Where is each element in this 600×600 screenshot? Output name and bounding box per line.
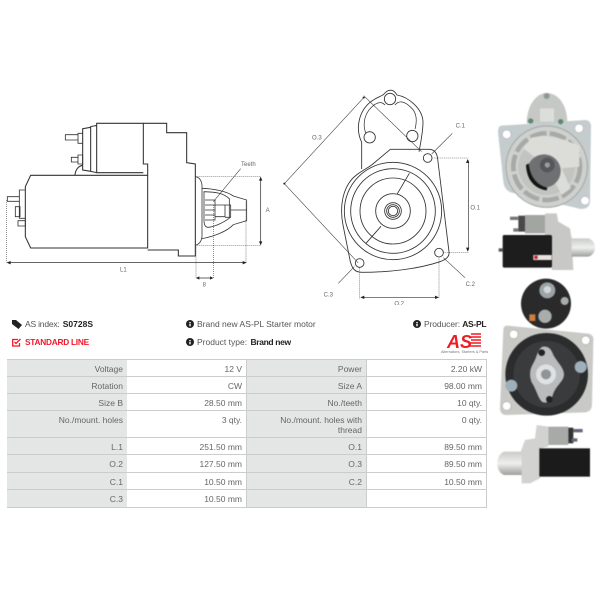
photo: mirrored side view [497, 425, 590, 483]
specification table: 89.50 mm [444, 459, 482, 469]
front view labels: C.3 [324, 292, 334, 298]
specification table: thread [338, 425, 362, 435]
specification table: 3 qty. [222, 415, 242, 425]
side view labels: Teeth [241, 162, 256, 168]
specification table: Rotation [91, 381, 123, 391]
side view labels [120, 162, 270, 288]
front view labels: O.1 [470, 205, 481, 211]
producer: Producer: AS-PL [424, 319, 486, 329]
icon: checked box [12, 338, 21, 347]
front view labels: C.2 [466, 282, 476, 288]
side view technical drawing [6, 122, 270, 288]
dimension lines [7, 169, 261, 279]
product type: Product type: Brand new [197, 337, 291, 347]
dimension lines [284, 96, 468, 298]
drive nose and pinion [195, 177, 247, 245]
standard line badge: STANDARD LINE [25, 337, 89, 347]
specification table: 28.50 mm [204, 398, 242, 408]
icon: info [186, 338, 194, 346]
specification table: O.3 [348, 459, 362, 469]
specification table: 89.50 mm [444, 442, 482, 452]
icon: info [413, 320, 421, 328]
specification table: 10 qty. [457, 398, 482, 408]
specification table: 12 V [224, 364, 242, 374]
front view labels: C.1 [456, 124, 466, 130]
specification table: O.1 [348, 442, 362, 452]
specification table: 127.50 mm [199, 459, 242, 469]
specification table: No./mount. holes with [280, 415, 362, 425]
specification table: CW [228, 381, 242, 391]
arrowheads and points [283, 97, 469, 299]
photo: rear view [500, 279, 593, 416]
side view labels: L1 [120, 267, 127, 273]
photos: motor front flange and side view [498, 92, 595, 270]
specification table: 2.20 kW [451, 364, 482, 374]
specification table: C.3 [110, 494, 123, 504]
specification table: C.2 [349, 477, 362, 487]
AS-PL logo [441, 332, 488, 354]
specification table: Size B [98, 398, 123, 408]
specification table: L.1 [111, 442, 123, 452]
side view labels: 8 [203, 282, 207, 288]
specification table: 10.50 mm [204, 494, 242, 504]
specification table [7, 359, 487, 508]
specification table: No./mount. holes [59, 415, 123, 425]
flange and solenoid outline [342, 90, 449, 272]
specification table: 0 qty. [462, 415, 482, 425]
arrowheads [7, 177, 262, 280]
photo: front flange [498, 93, 591, 209]
front view labels: O.3 [312, 135, 322, 141]
specification table: Power [338, 364, 362, 374]
specification table: Size A [338, 381, 362, 391]
specification table: Voltage [95, 364, 123, 374]
front view technical drawing [283, 90, 481, 305]
drive end rings [344, 162, 442, 260]
AS-PL logo: Alternators, Starters & Parts [441, 350, 488, 354]
specification table: O.2 [109, 459, 123, 469]
photos: motor rear view and mirrored side view [497, 278, 594, 484]
icon: info [186, 320, 194, 328]
specification table: 98.00 mm [444, 381, 482, 391]
side view labels: A [266, 208, 270, 214]
specification table: C.1 [110, 477, 123, 487]
specification table: 10.50 mm [444, 477, 482, 487]
AS index: AS index: S0728S [25, 319, 93, 329]
specification table: 10.50 mm [204, 477, 242, 487]
description: Brand new AS-PL Starter motor [197, 319, 316, 329]
motor body outline [7, 123, 195, 256]
specification table: 251.50 mm [199, 442, 242, 452]
icon: tags [12, 320, 22, 329]
AS-PL logo: AS [446, 332, 472, 352]
specification table: No./teeth [328, 398, 362, 408]
front view labels [312, 124, 481, 308]
photo: side view with black housing [499, 213, 595, 270]
